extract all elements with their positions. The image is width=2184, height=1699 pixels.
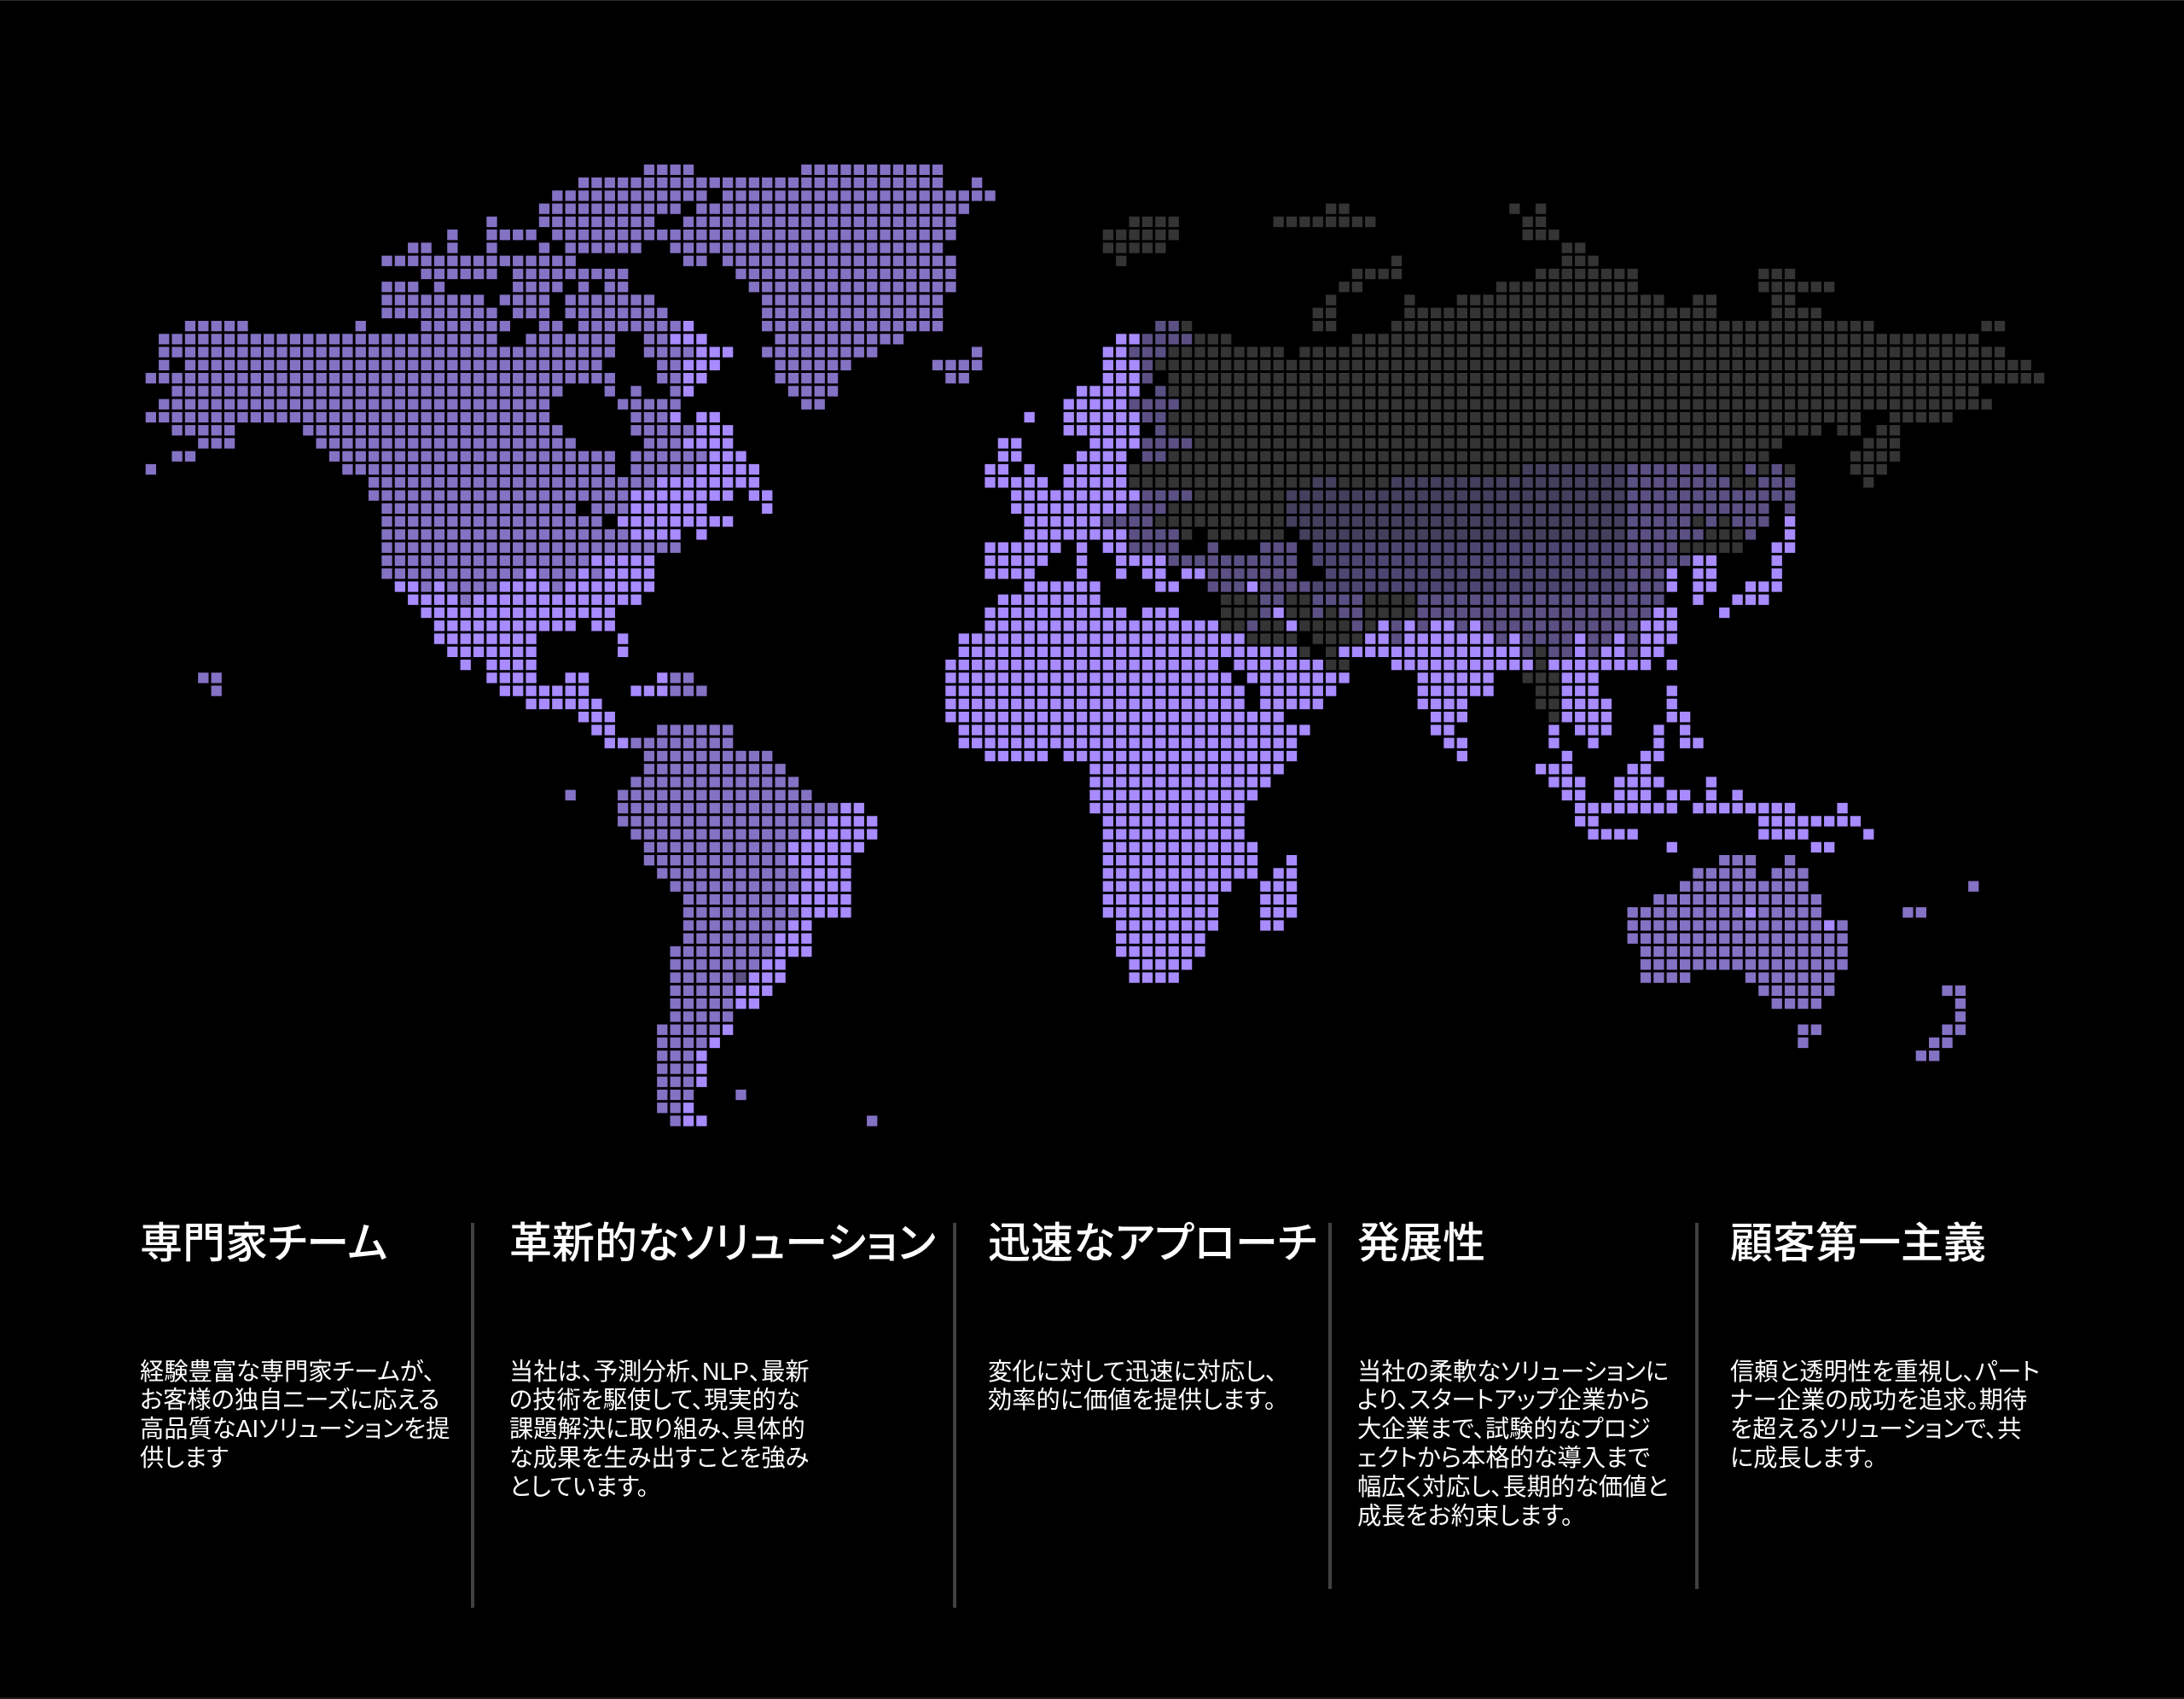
world map: [145, 164, 2044, 1126]
heading: 顧客第一主義: [1730, 1219, 1986, 1267]
Asia and Russia: [1103, 209, 2047, 847]
body text: [1357, 1357, 1669, 1529]
South America: [566, 730, 880, 1121]
body text: [988, 1357, 1277, 1413]
body text: 当社は、予測分析、NLP、最新: [509, 1357, 810, 1384]
body text: としています。: [509, 1473, 648, 1500]
body text: の技術を駆使して、現実的な: [509, 1386, 800, 1413]
body text: に成長します。: [1730, 1444, 1875, 1471]
column: rapid approach: [988, 1219, 1316, 1413]
body text: 当社の柔軟なソリューションに: [1357, 1357, 1669, 1384]
column: scalability: [1357, 1219, 1669, 1529]
body text: ナー企業の成功を追求。期待: [1730, 1386, 2027, 1413]
body text: 大企業まで、試験的なプロジ: [1357, 1415, 1651, 1442]
body text: [140, 1357, 450, 1471]
body text: 効率的に価値を提供します。: [988, 1386, 1276, 1413]
Australia and New Zealand: [1628, 860, 1981, 1056]
body text: 経験豊富な専門家チームが、: [140, 1357, 435, 1384]
heading: 革新的なソリューション: [509, 1219, 936, 1267]
heading: 発展性: [1357, 1219, 1485, 1267]
body text: 変化に対して迅速に対応し、: [988, 1357, 1277, 1384]
body text: 信頼と透明性を重視し、パート: [1730, 1357, 2040, 1384]
body text: お客様の独自ニーズに応える: [140, 1386, 439, 1413]
Europe: [985, 339, 1221, 625]
body text: 高品質なAIソリューションを提: [140, 1415, 450, 1442]
body text: 課題解決に取り組み、具体的: [509, 1415, 805, 1442]
body text: 成長をお約束します。: [1357, 1502, 1573, 1529]
body text: [509, 1357, 810, 1500]
body text: より、スタートアップ企業から: [1357, 1386, 1650, 1413]
column: customer first: [1730, 1219, 2040, 1471]
Africa and Middle East: [945, 639, 1352, 978]
body text: を超えるソリューションで、共: [1730, 1415, 2022, 1442]
body text: 供します: [140, 1444, 229, 1471]
heading: 迅速なアプローチ: [988, 1219, 1316, 1267]
body text: な成果を生み出すことを強み: [509, 1444, 809, 1471]
body text: ェクトから本格的な導入まで: [1357, 1444, 1650, 1471]
body text: [1730, 1357, 2040, 1471]
North America and Greenland: [146, 170, 998, 730]
heading: 専門家チーム: [140, 1219, 387, 1267]
column: expert team: [140, 1219, 450, 1471]
column: innovative solutions: [509, 1219, 936, 1500]
body text: 幅広く対応し、長期的な価値と: [1357, 1473, 1668, 1500]
